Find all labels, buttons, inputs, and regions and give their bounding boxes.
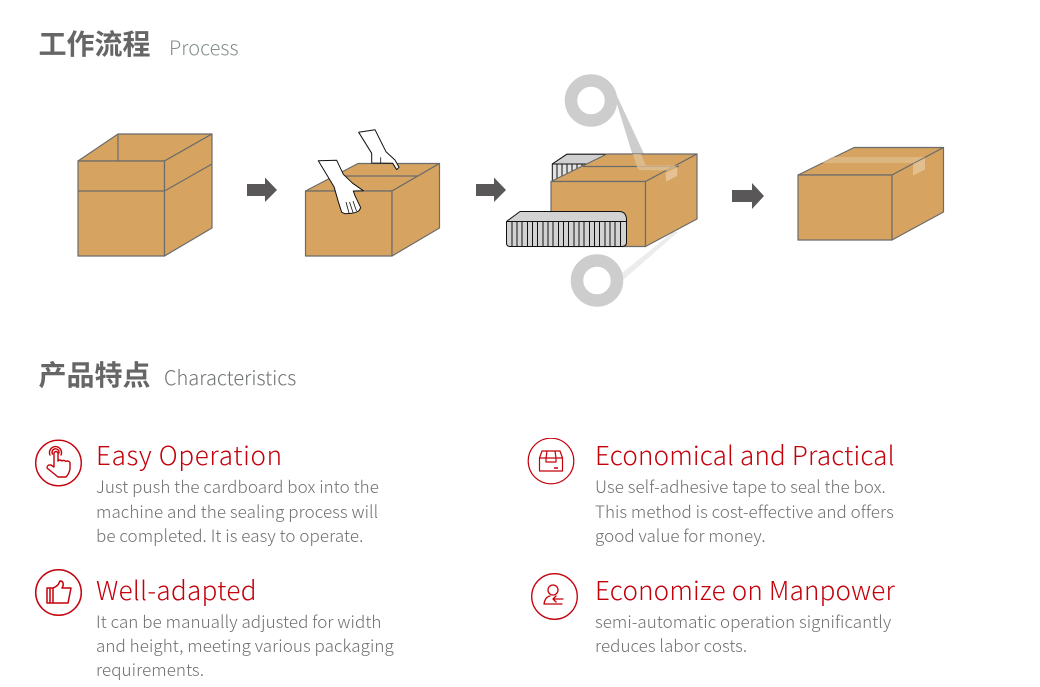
tape strip on carton top xyxy=(633,154,678,170)
back belt xyxy=(552,154,610,181)
icon: back hand xyxy=(359,130,399,170)
bottom tape roll xyxy=(622,232,678,281)
heading: process: 工作流程 xyxy=(38,23,151,63)
icon: front hand xyxy=(318,160,363,214)
description: be completed. It is easy to operate. xyxy=(96,522,363,547)
heading: characteristics xyxy=(38,354,296,394)
description: reduces labor costs. xyxy=(595,632,747,657)
description: and height, meeting various packaging xyxy=(96,632,394,657)
top tape roll xyxy=(571,80,611,120)
description: good value for money. xyxy=(595,522,766,547)
box: sealed xyxy=(798,148,944,240)
description: machine and the sealing process will xyxy=(96,498,378,522)
description: semi-automatic operation significantly xyxy=(595,608,891,633)
feature: easy operation xyxy=(35,436,379,547)
icon: person with arrow xyxy=(531,573,578,620)
heading: process: Process xyxy=(169,32,238,61)
box: taping machine xyxy=(506,80,697,300)
arrow 1 xyxy=(247,178,277,202)
tape xyxy=(822,157,925,163)
arrow 3 xyxy=(732,183,764,209)
title: Economical and Practical xyxy=(595,436,895,473)
icon: thumbs up xyxy=(34,569,82,616)
description: It can be manually adjusted for width xyxy=(96,608,381,633)
title: Economize on Manpower xyxy=(595,571,895,608)
process diagram xyxy=(77,74,944,307)
icon: parcel box xyxy=(528,438,574,484)
icon: tapping hand xyxy=(35,440,82,486)
tape flap xyxy=(666,167,677,182)
description: Use self-adhesive tape to seal the box. xyxy=(595,473,886,498)
front belt xyxy=(506,212,626,246)
carton xyxy=(551,154,697,246)
description xyxy=(96,473,379,547)
feature: well-adapted xyxy=(34,569,394,681)
feature: economical and practical xyxy=(528,436,895,547)
description: Just push the cardboard box into the xyxy=(96,473,379,498)
arrow 2 xyxy=(476,178,506,202)
description xyxy=(96,608,394,681)
heading: characteristics: 产品特点 xyxy=(38,354,151,394)
description xyxy=(595,608,891,657)
description: requirements. xyxy=(96,656,204,681)
description xyxy=(595,473,894,547)
heading: process xyxy=(38,23,238,63)
box: open xyxy=(78,134,212,256)
box: folding flaps with hands xyxy=(306,130,440,256)
description: This method is cost-effective and offers xyxy=(595,498,894,522)
heading: characteristics: Characteristics xyxy=(164,362,296,391)
title: Well-adapted xyxy=(96,571,257,608)
title: Easy Operation xyxy=(96,436,283,473)
feature: economize on manpower xyxy=(531,571,895,657)
